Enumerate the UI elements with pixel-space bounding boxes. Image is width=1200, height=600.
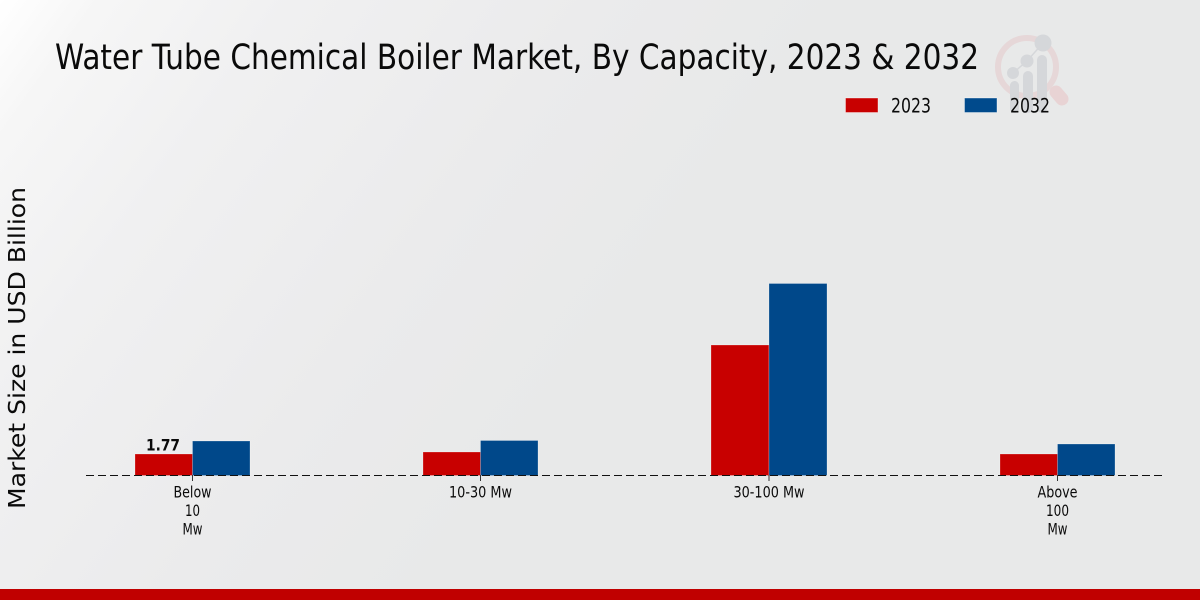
legend label 2023: 2023 bbox=[891, 94, 931, 117]
legend swatch 2032 bbox=[964, 98, 997, 112]
legend bbox=[846, 94, 1050, 117]
bars: Below 10 Mw bbox=[135, 441, 250, 476]
category label: 30-100 Mw: 30-100 Mw bbox=[734, 482, 804, 502]
category label: Above 100 Mw: 100 bbox=[1046, 501, 1069, 520]
legend swatch 2023 bbox=[846, 98, 878, 112]
footer bar bbox=[0, 589, 1200, 600]
category label: Below 10 Mw: Mw bbox=[182, 520, 202, 538]
legend label 2032: 2032 bbox=[1010, 94, 1050, 117]
category label: Above 100 Mw bbox=[1038, 482, 1078, 538]
category label: Above 100 Mw: Mw bbox=[1048, 520, 1068, 538]
category label: Below 10 Mw: 10 bbox=[185, 501, 200, 520]
category label: Below 10 Mw: Below bbox=[174, 482, 212, 502]
data label: 1.77 bbox=[146, 436, 180, 454]
bars: Above 100 Mw bbox=[1000, 444, 1115, 476]
x axis baseline bbox=[86, 474, 1164, 476]
y axis label: Market Size in USD Billion bbox=[5, 187, 31, 509]
category label: 10-30 Mw: 10-30 Mw bbox=[449, 482, 512, 502]
bars: 30-100 Mw bbox=[711, 284, 827, 476]
axis ticks bbox=[192, 475, 1058, 481]
title: Water Tube Chemical Boiler Market, By Capacity, 2023 & 2032 bbox=[55, 38, 979, 78]
category label: Below 10 Mw bbox=[174, 482, 212, 538]
bars: 10-30 Mw bbox=[423, 440, 538, 476]
watermark logo bbox=[998, 34, 1062, 113]
category label: Above 100 Mw: Above bbox=[1038, 482, 1078, 502]
bar chart bbox=[86, 284, 1164, 538]
